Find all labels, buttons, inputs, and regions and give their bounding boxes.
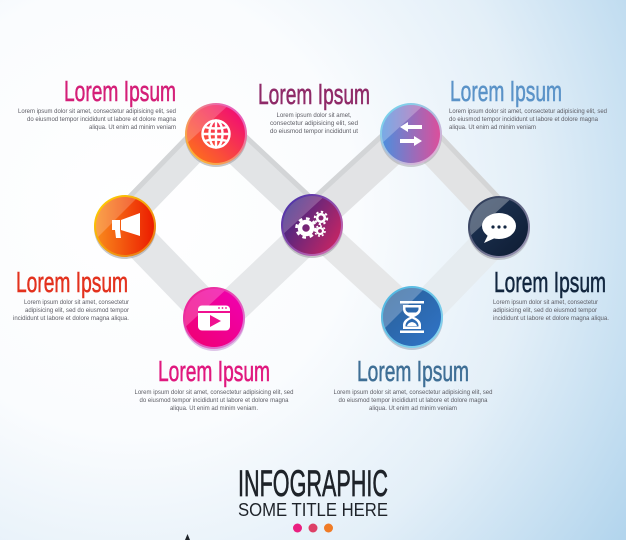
icon: hourglass badge xyxy=(380,285,443,350)
text block: middle left: Lorem ipsum dolor sit amet, consectetur xyxy=(24,300,129,306)
text block: middle right: adipisicing elit, sed do eiusmod tempor xyxy=(493,308,597,314)
heading: top right: Lorem Ipsum xyxy=(450,76,562,108)
text block: top left: Lorem ipsum dolor sit amet, consectetur adipisicing elit, sed xyxy=(18,109,176,115)
text block: middle left: incididunt ut labore et dolore magna aliqua. xyxy=(13,316,129,322)
text block: bottom left: aliqua. Ut enim ad minim veniam. xyxy=(170,406,258,412)
heading: top centre: Lorem Ipsum xyxy=(258,79,370,111)
icon: globe badge xyxy=(184,102,247,167)
title: INFOGRAPHIC xyxy=(238,462,388,504)
text block: top right: do eiusmod tempor incididunt ut labore et dolore magna xyxy=(449,117,599,123)
decorative dots xyxy=(293,524,333,532)
cropped mark at bottom edge xyxy=(185,534,190,540)
text block: bottom right: do eiusmod tempor incididunt ut labore et dolore magna xyxy=(338,398,488,404)
icon: arrows badge xyxy=(379,102,442,167)
heading: top left: Lorem Ipsum xyxy=(64,76,176,108)
text block: bottom left: do eiusmod tempor incididunt ut labore et dolore magna xyxy=(140,398,289,404)
icon: speech bubble badge xyxy=(467,195,530,260)
text block: middle right: Lorem ipsum dolor sit amet, consectetur xyxy=(493,300,598,306)
text block: top left: aliqua. Ut enim ad minim veniam xyxy=(89,125,176,131)
text block: middle left: adipisicing elit, sed do eiusmod tempor xyxy=(25,308,129,314)
text block: top centre: Lorem ipsum dolor sit amet, xyxy=(276,113,352,119)
heading: middle left: Lorem Ipsum xyxy=(16,267,128,299)
icon: gears badge xyxy=(280,193,343,258)
infinity band connector xyxy=(113,120,513,321)
text block: top right: aliqua. Ut enim ad minim veniam xyxy=(449,125,536,131)
text block: bottom right: aliqua. Ut enim ad minim veniam xyxy=(369,406,457,412)
heading: bottom right: Lorem Ipsum xyxy=(357,356,469,388)
subtitle: SOME TITLE HERE xyxy=(238,500,388,520)
text block: bottom left: Lorem ipsum dolor sit amet, consectetur adipisicing elit, sed xyxy=(134,390,294,396)
icon: video badge xyxy=(182,286,245,351)
heading: bottom left: Lorem Ipsum xyxy=(158,356,270,388)
text block: bottom right: Lorem ipsum dolor sit amet, consectetur adipisicing elit, sed xyxy=(334,390,492,396)
text block: middle right: incididunt ut labore et dolore magna aliqua. xyxy=(493,316,609,322)
text block: top left: do eiusmod tempor incididunt ut labore et dolore magna xyxy=(27,117,177,123)
text block: top centre: consectetur adipisicing elit, sed xyxy=(270,121,358,127)
text block: top centre: do eiusmod tempor incididunt ut xyxy=(270,129,358,135)
icon: megaphone badge xyxy=(93,194,156,259)
text block: top right: Lorem ipsum dolor sit amet, consectetur adipisicing elit, sed xyxy=(449,109,607,115)
